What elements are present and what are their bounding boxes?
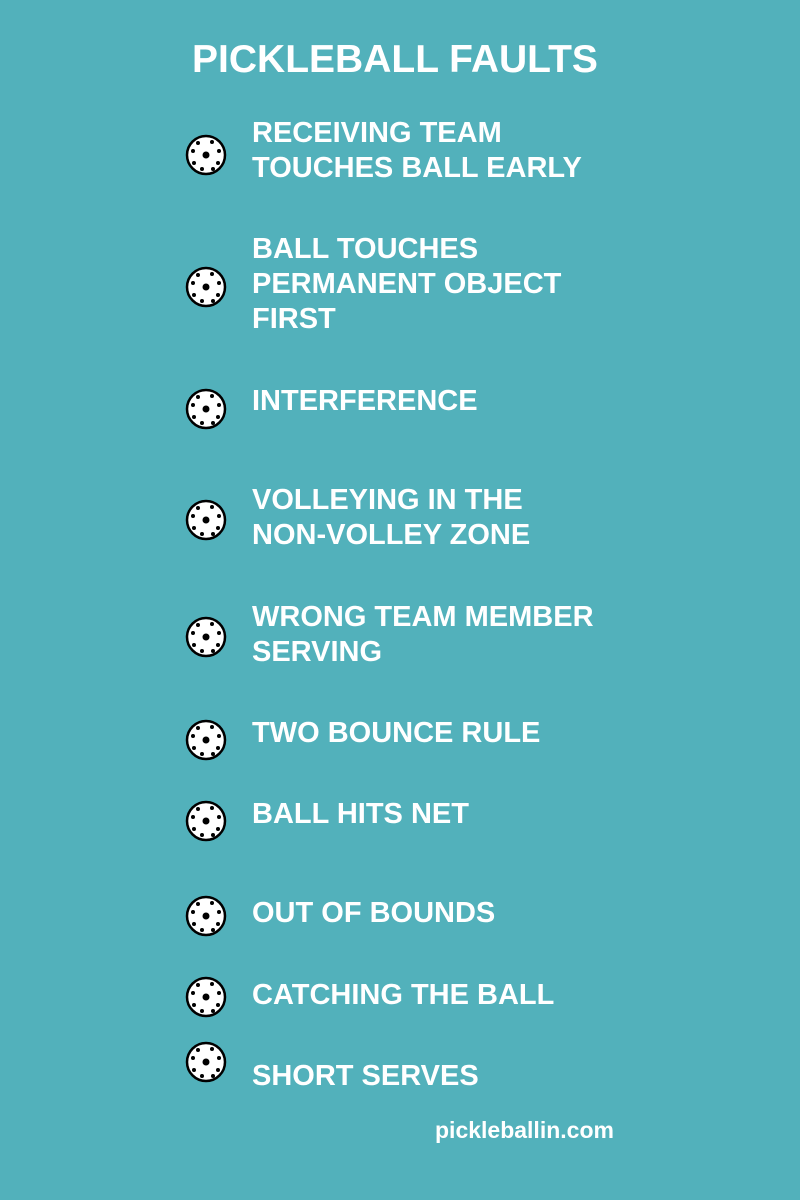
item 1 [252, 117, 582, 184]
item 6: TWO BOUNCE RULE [252, 717, 540, 749]
icon: ball 8 [186, 896, 226, 936]
item 1: RECEIVING TEAM [252, 117, 502, 149]
item 2: FIRST [252, 303, 336, 335]
icon: ball 7 [186, 800, 226, 842]
icon: ball 9 [186, 976, 226, 1018]
title: PICKLEBALL FAULTS [192, 38, 598, 81]
item 2: BALL TOUCHES [252, 233, 478, 265]
item 5 [252, 601, 594, 668]
item 4 [252, 484, 530, 551]
item 4: VOLLEYING IN THE [252, 484, 523, 516]
item 9: CATCHING THE BALL [252, 979, 554, 1011]
item 3: INTERFERENCE [252, 385, 478, 417]
icon: ball 6 [186, 720, 226, 760]
icon: ball 3 [186, 388, 226, 430]
item 1: TOUCHES BALL EARLY [252, 152, 582, 184]
item 4: NON-VOLLEY ZONE [252, 519, 530, 551]
icon: ball 10 [186, 1042, 226, 1082]
icon: ball 1 [186, 134, 226, 176]
footer: pickleballin.com [435, 1117, 614, 1143]
item 2: PERMANENT OBJECT [252, 268, 561, 300]
item 5: WRONG TEAM MEMBER [252, 601, 594, 633]
item 7: BALL HITS NET [252, 798, 469, 830]
item 10: SHORT SERVES [252, 1060, 479, 1092]
icon: ball 5 [186, 616, 226, 658]
icon: ball 2 [186, 266, 226, 308]
item 5: SERVING [252, 636, 382, 668]
icon: ball 4 [186, 500, 226, 540]
item 2 [252, 233, 562, 335]
item 8: OUT OF BOUNDS [252, 897, 495, 929]
